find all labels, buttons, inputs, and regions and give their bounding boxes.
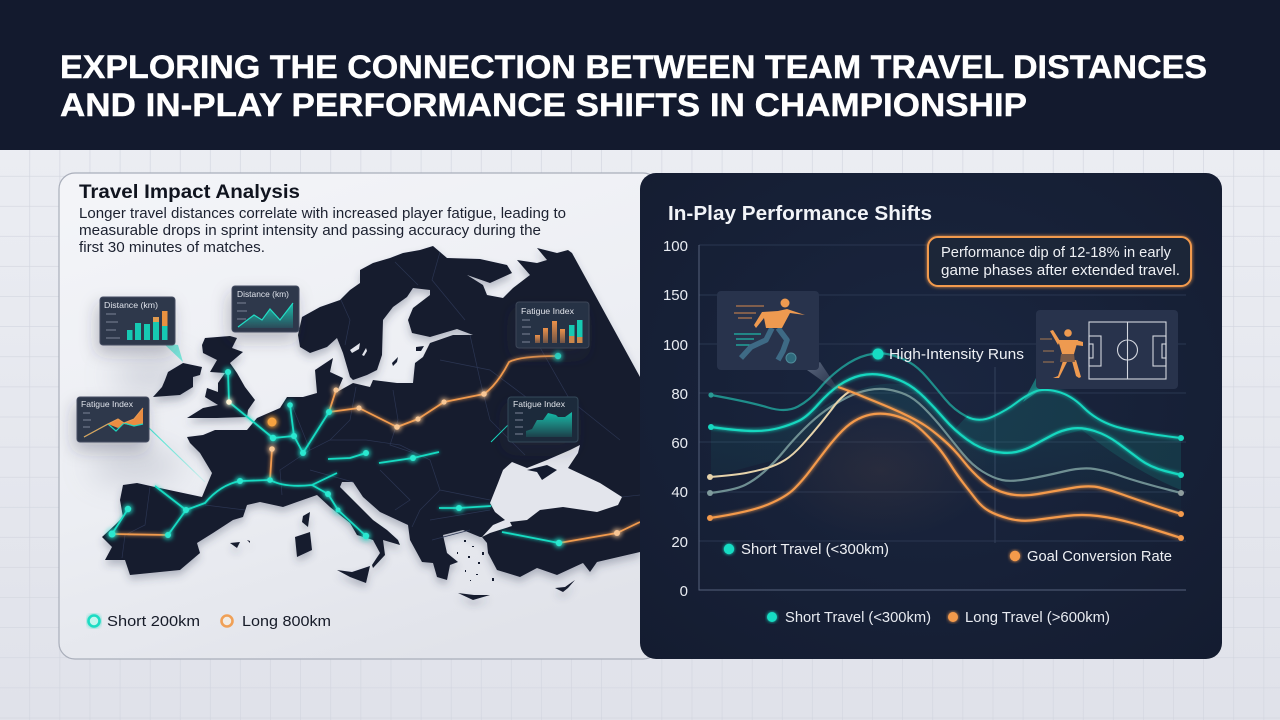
text block: travel impact description: first 30 minutes of matches. — [79, 240, 265, 256]
card: fatigue index line chart — [77, 397, 149, 442]
text block: travel impact description: Longer travel distances correlate with increased player fatigue, leading to — [79, 206, 566, 222]
curve: high-intensity runs, dim section — [711, 353, 966, 416]
map legend: Short 200km — [107, 613, 200, 630]
card: distance bars: Distance (km) — [104, 300, 158, 310]
map legend — [88, 613, 331, 630]
y axis labels: 60 — [671, 435, 688, 452]
card: fatigue index area chart — [508, 397, 578, 442]
title banner: AND IN-PLAY PERFORMANCE SHIFTS IN CHAMPIONSHIP — [60, 87, 1027, 123]
icon card: sprinting player — [717, 291, 819, 370]
map legend: Long 800km — [242, 613, 331, 630]
icon card: player and pitch — [1036, 310, 1178, 389]
y axis labels: 80 — [671, 386, 688, 403]
y axis labels: 0 — [680, 583, 688, 600]
card: distance area chart: Distance (km) — [237, 289, 289, 299]
panel: travel impact analysis — [59, 173, 659, 659]
callout connectors — [149, 343, 508, 482]
curve: long travel lower — [710, 414, 1181, 538]
y axis labels: 150 — [663, 287, 688, 304]
series label: short travel: Short Travel (<300km) — [741, 542, 889, 558]
series label: goal conversion rate: Goal Conversion Rate — [1027, 549, 1172, 565]
curve: grey mid series — [710, 389, 1181, 493]
panel: in-play performance shifts — [640, 173, 1222, 659]
callout: performance dip: game phases after extended travel. — [941, 263, 1180, 279]
card: distance bars — [100, 297, 175, 345]
legend marker: short — [88, 616, 100, 626]
connector: field card — [1023, 378, 1043, 402]
curve: cream rising section — [710, 391, 850, 477]
motion lines — [1040, 339, 1054, 362]
y axis labels: 100 — [663, 337, 688, 354]
chart grid and axes — [699, 245, 1186, 590]
title banner — [0, 0, 1280, 150]
chart legend: Short Travel (<300km) — [785, 610, 931, 626]
callout: performance dip: Performance dip of 12-18% in early — [941, 245, 1172, 261]
chart legend: Long Travel (>600km) — [965, 610, 1110, 626]
player head — [780, 298, 790, 308]
speed lines — [734, 306, 764, 318]
curve: long travel upper — [838, 387, 1181, 514]
pitch diagram — [1089, 322, 1166, 379]
callout: performance dip — [928, 237, 1191, 286]
coach figure — [1050, 329, 1083, 378]
routes: long travel — [112, 356, 640, 543]
curve: short travel — [711, 374, 1181, 475]
curve end points — [707, 392, 1184, 541]
soft map shadows — [90, 359, 188, 481]
card: fatigue index bars: Fatigue Index — [521, 306, 575, 316]
card: fatigue index bars — [516, 302, 589, 348]
map of Europe — [102, 246, 640, 600]
line chart — [663, 238, 1186, 600]
chart legend — [767, 610, 1110, 626]
series label: high-intensity runs: High-Intensity Runs — [889, 347, 1024, 363]
country borders — [122, 252, 640, 558]
seas cut into land — [350, 343, 622, 537]
y axis labels: 40 — [671, 484, 688, 501]
title banner: EXPLORING THE CONNECTION BETWEEN TEAM TRAVEL DISTANCES — [60, 49, 1207, 85]
connector: runner card — [807, 362, 842, 395]
player legs — [741, 328, 787, 360]
land: Crimea and Baltic islands — [392, 346, 557, 581]
text block: travel impact description: measurable drops in sprint intensity and passing accuracy during the — [79, 223, 541, 239]
heading: travel impact analysis: Travel Impact Analysis — [79, 181, 300, 203]
route nodes — [108, 353, 620, 546]
heading: in-play performance shifts: In-Play Performance Shifts — [668, 203, 932, 225]
shaded bands — [954, 388, 1181, 490]
ball — [786, 353, 796, 363]
player torso — [754, 309, 805, 328]
y axis labels: 100 — [663, 238, 688, 255]
y axis labels: 20 — [671, 534, 688, 551]
routes: short travel — [112, 372, 559, 543]
curve: high-intensity runs, bright section — [966, 390, 1181, 438]
legend marker: long — [222, 616, 232, 626]
text block: travel impact description — [79, 206, 566, 256]
card: fatigue index area chart: Fatigue Index — [513, 399, 566, 409]
card: fatigue index line chart: Fatigue Index — [81, 399, 134, 409]
card: distance area chart — [232, 286, 299, 332]
y axis labels — [663, 238, 688, 600]
